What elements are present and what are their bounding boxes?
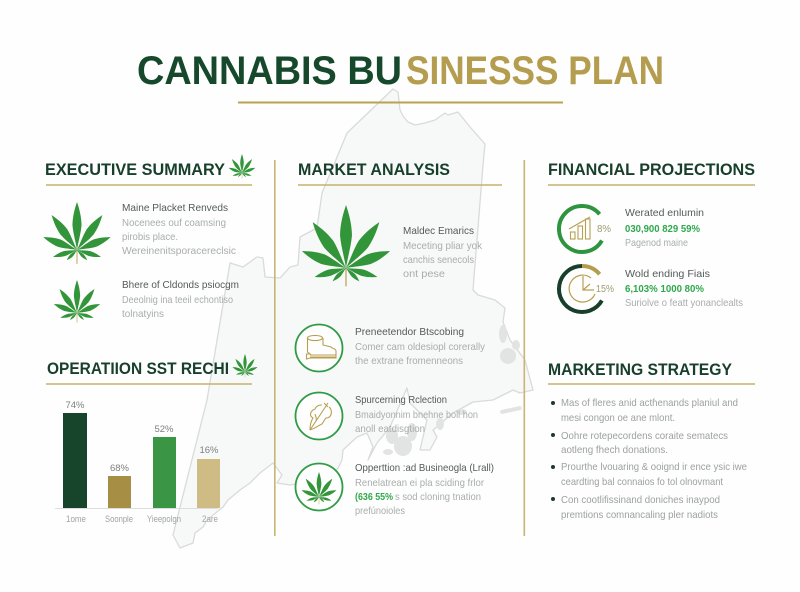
title <box>137 49 664 93</box>
bar chart: Yieepolgn <box>147 514 181 525</box>
bullet markers <box>551 401 555 501</box>
panel: market analysis <box>296 160 502 517</box>
icon: operations heading leaf <box>232 354 258 377</box>
bar chart: 52% <box>154 424 174 435</box>
bullet list text: aotleng fhech donations. <box>561 444 668 456</box>
title underline <box>238 102 563 104</box>
text block: market summary <box>403 225 483 280</box>
icon: husk in circle <box>296 392 342 440</box>
bullet list text: Oohre rotepecordens coraite sematecs <box>561 430 728 442</box>
progress ring: share: 15% <box>596 284 614 295</box>
text block: third market item: Renelatrean ei pla sciding frlor <box>355 477 484 489</box>
text block: third market item: prefúnoioles <box>355 505 405 517</box>
title: SINESSS PLAN <box>406 49 664 93</box>
market heading rule <box>298 184 502 186</box>
text block: first projection: Pagenod maine <box>625 237 688 249</box>
icon: leaf in circle <box>296 464 342 510</box>
bar chart <box>55 400 220 525</box>
operations heading rule <box>46 383 252 385</box>
bullet list text: Prourthe lvouaring & ooignd ir ence ysic iwe <box>561 461 747 473</box>
text block: second projection <box>625 268 743 309</box>
text block: market summary: canchis senecols <box>403 254 474 266</box>
text block: first market item: the extrane fromenneons <box>355 355 463 367</box>
text block: market summary: ont pese <box>403 268 445 280</box>
text block: third market item: (636 55% <box>355 492 393 503</box>
progress ring: share <box>559 266 614 312</box>
title: CANNABIS BU <box>137 49 402 93</box>
bar chart: 74% <box>65 400 85 411</box>
icon: market leaf <box>300 205 392 286</box>
icon: heading leaf <box>228 154 256 179</box>
text block: first projection: Werated enlumin <box>625 207 704 219</box>
progress ring: growth <box>559 206 611 252</box>
marketing heading rule <box>548 383 755 385</box>
text block: second summary item: Deeolnig ina teeil echontiso <box>122 294 233 306</box>
progress ring: growth: 8% <box>597 224 611 235</box>
text block: second market item: Spurcerning Rclection <box>355 394 447 406</box>
bullet list text: Mas of fleres anid actɦenands planiul and <box>561 397 738 409</box>
text block: second market item <box>355 394 478 435</box>
financial heading rule <box>548 184 755 186</box>
text block: second summary item: tolnatyins <box>122 308 164 320</box>
heading: marketing strategy: MARKETING STRATEGY <box>548 360 733 379</box>
text block: first market item: Comer cam oldesiopl corerally <box>355 341 486 353</box>
bullet list text: mesi congon oe ane mlont. <box>561 412 675 424</box>
bar chart: Soonple <box>105 514 133 525</box>
text block: second projection: Suriolve o featt yonanclealts <box>625 297 743 309</box>
heading: operations: OPERATIION SST RECHI <box>47 359 229 378</box>
text block: first market item: Preneetendor Btscobing <box>355 326 464 338</box>
bullet list text: Con cootlifissinand doniches inaypod <box>561 494 720 506</box>
heading: financial projections: FINANCIAL PROJECTIONS <box>548 160 755 179</box>
text block: second projection: 6,103% 1000 80% <box>625 284 704 295</box>
text block: second summary item: Bhere of Cldonds psiocgm <box>122 279 239 291</box>
panel: operations <box>46 354 258 525</box>
column dividers <box>274 160 525 536</box>
text block: first summary item: Maine Placket Renveds <box>122 202 228 214</box>
panel: executive summary <box>42 154 256 323</box>
text block: first projection: 030,900 829 59% <box>625 224 700 235</box>
text block: market summary: Meceting pliar yok <box>403 240 483 252</box>
text block: market summary: Maldec Emarics <box>403 225 474 237</box>
bar chart: 68% <box>110 463 130 474</box>
text block: second projection: Wold ending Fiais <box>625 268 710 280</box>
text block: first market item <box>355 326 486 367</box>
bullet list text: ceardting bal connaios fo tol olnovmant <box>561 476 723 488</box>
text block: second summary item <box>122 279 239 320</box>
text block: second market item: Bmaidyonnim bnehne boll hon <box>355 409 478 421</box>
text block: first summary item <box>122 202 236 257</box>
bullet list text <box>561 397 747 521</box>
icon: large leaf <box>42 202 112 264</box>
text block: first summary item: Wereinenitsporacereclsic <box>122 245 236 257</box>
bullet list text: premtions comnancaling pler nadiots <box>561 509 718 521</box>
bar chart: 2are <box>202 514 218 525</box>
icon: boot in circle <box>296 324 342 372</box>
text block: third market item <box>355 462 494 517</box>
text block: third market item: s sod cloning tnation <box>395 491 481 503</box>
heading: executive summary: EXECUTIVE SUMMARY <box>45 160 226 179</box>
text block: second market item: anoll eatdisgtion <box>355 423 425 435</box>
text block: first summary item: Nocenees ouf coamsing <box>122 217 226 229</box>
heading rule <box>46 184 252 186</box>
heading: market analysis: MARKET ANALYSIS <box>298 160 450 179</box>
panel: financial projections <box>548 160 755 312</box>
text block: first summary item: pirobis place. <box>122 231 178 243</box>
background map of Maine <box>173 89 533 548</box>
bar chart: 16% <box>199 445 219 456</box>
bar chart: 1ome <box>66 514 86 525</box>
text block: third market item: Opperttion :ad Busineogla (Lrall) <box>355 462 494 474</box>
panel: marketing strategy <box>548 360 755 521</box>
icon: small leaf <box>53 280 101 323</box>
text block: first projection <box>625 207 704 249</box>
